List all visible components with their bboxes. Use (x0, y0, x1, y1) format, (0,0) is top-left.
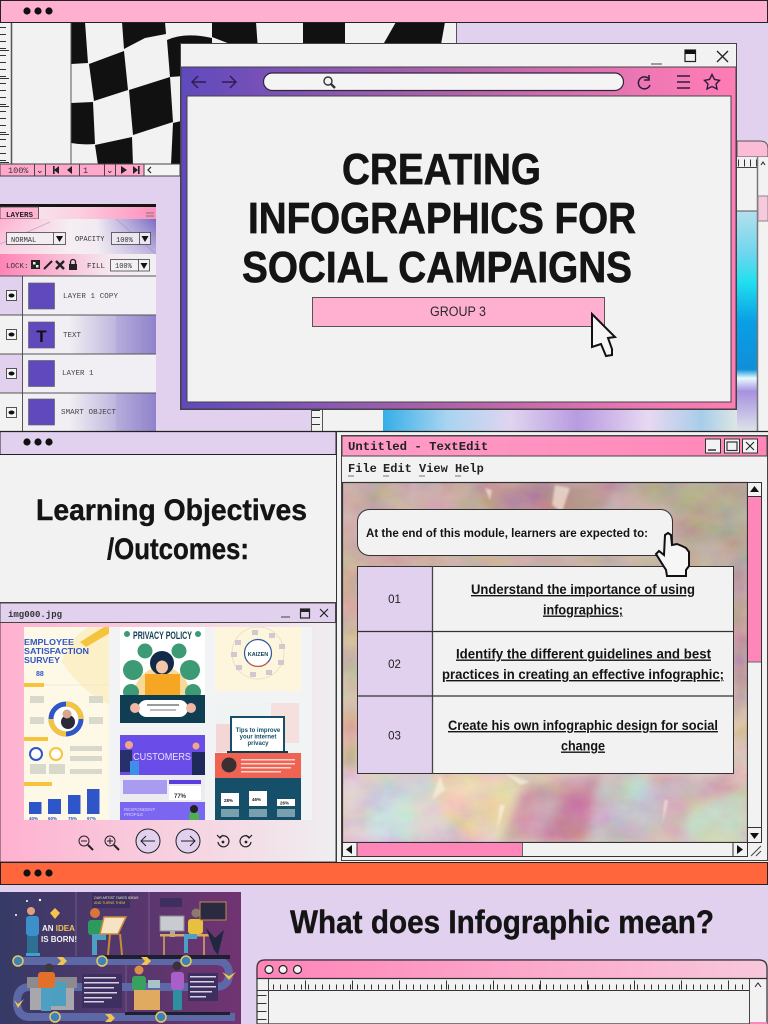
process path (17, 961, 235, 1017)
row 2: Identify the different guidelines and best (456, 646, 711, 662)
editor title bar (342, 436, 767, 456)
viewer title bar (0, 603, 336, 622)
bottom window rulers (257, 979, 767, 1024)
lock row: LOCK: (6, 263, 29, 271)
layer rows: LAYER 1 COPY (63, 293, 118, 301)
editor menu: View (419, 462, 449, 476)
row 2 (388, 646, 724, 682)
thumbnail: customers: CUSTOMERS (133, 752, 191, 763)
editor menu: Edit (383, 462, 412, 476)
editor menu: File (348, 462, 377, 476)
thumbnail: employee survey: SURVEY (24, 655, 60, 665)
address bar (264, 73, 624, 90)
subtitle button (312, 298, 604, 326)
heading: learning objectives: /Outcomes: (107, 533, 249, 566)
layer rows: SMART OBJECT (61, 409, 116, 417)
row 3: 03 (388, 730, 401, 742)
icon: hand cursor (656, 533, 689, 576)
blend controls: NORMAL (11, 237, 36, 245)
blend controls: OPACITY (75, 236, 105, 244)
infographic thumbnail: process story: OUR ARTIST TAKES IDEAS (94, 896, 139, 900)
title (242, 145, 636, 292)
nav arrows (192, 76, 236, 88)
section divider bar: orange (0, 862, 768, 884)
subtitle button: GROUP 3 (430, 304, 486, 319)
thumbnail: privacy policy (120, 627, 205, 723)
blend controls: 100% (116, 237, 134, 245)
bottom window (257, 960, 767, 1024)
blend controls (0, 219, 156, 254)
layers panel (0, 204, 156, 431)
icon: refresh (638, 75, 650, 89)
swatches (28, 283, 54, 425)
editor menu (348, 462, 484, 476)
text editor window (342, 436, 768, 860)
heading: what does infographic mean: What does Infographic mean? (290, 904, 714, 940)
infographic thumbnail: process story: IS BORN! (41, 935, 77, 944)
thumbnail: internet privacy: your internet (240, 734, 276, 740)
thumbnail: customers: 77% (174, 794, 187, 800)
row 3: Create his own infographic design for social (448, 717, 718, 733)
row 2: 02 (388, 659, 401, 671)
step nodes (13, 956, 191, 1022)
figure: designer (160, 902, 226, 955)
eye toggles (6, 290, 16, 418)
heading: learning objectives (36, 494, 307, 566)
thumbnail: customers (120, 735, 205, 820)
figure: printer (27, 964, 77, 1011)
thumbnail: employee survey: 75% (68, 816, 77, 821)
thumbnail: employee survey: 97% (87, 816, 96, 821)
heading: learning objectives: Learning Objectives (36, 494, 307, 527)
back window: checkered canvas: ⌄ (106, 165, 114, 175)
lock row: FILL (87, 263, 106, 271)
status bar (0, 164, 180, 176)
thumbnail: employee survey (24, 627, 110, 821)
row 1: Understand the importance of using (471, 581, 695, 597)
thumbnail: internet privacy: Tips to improve (236, 728, 281, 734)
lock row (0, 254, 156, 276)
title: CREATING (342, 145, 541, 194)
row 1: infographics; (543, 602, 623, 618)
editor menu: Help (455, 462, 484, 476)
infographic thumbnail: process story: AND TURNS THEM (94, 901, 125, 905)
lock row: 100% (115, 263, 133, 271)
thumbnail: privacy policy: PRIVACY POLICY (133, 630, 192, 642)
icon: search (324, 77, 335, 88)
thumbnail: kaizen: KAIZEN (248, 652, 268, 658)
thumbnail: employee survey: EMPLOYEE (24, 637, 74, 647)
callout: module intro: At the end of this module, learners are expected to: (366, 526, 648, 540)
infographic thumbnail: process story (0, 892, 241, 1024)
holographic foil image (343, 483, 747, 842)
layer rows (0, 276, 156, 431)
infographic thumbnail: process story: AN IDEA (42, 924, 75, 933)
thumbnail: employee survey: 88 (36, 671, 44, 678)
thumbnail: internet privacy: 28% (224, 798, 233, 803)
row 1: 01 (388, 594, 401, 606)
image viewer window: img000.jpg (8, 610, 62, 620)
top title bar (0, 0, 768, 22)
gradient frame (181, 67, 736, 409)
checker pattern (71, 22, 445, 165)
thumbnail: internet privacy: 26% (280, 800, 289, 806)
tabs (0, 207, 156, 219)
icon: menu (677, 76, 690, 88)
image viewer window (0, 602, 336, 862)
row 2: practices in creating an effective infographic; (442, 666, 724, 682)
figure: idea (26, 907, 40, 956)
main browser window (180, 44, 736, 410)
thumbnail: employee survey: 60% (48, 816, 57, 821)
callout: module intro (358, 510, 672, 556)
editor title bar: Untitled - TextEdit (348, 440, 488, 454)
back window: checkered canvas (0, 22, 457, 176)
figure: sketching (88, 908, 126, 955)
vertical scrollbar (748, 482, 762, 842)
objectives table (357, 566, 734, 774)
layer rows: TEXT (63, 332, 82, 340)
row 1 (388, 581, 695, 618)
layers panel: LAYERS (6, 212, 34, 220)
row 3: change (561, 738, 605, 754)
layer rows: LAYER 1 (62, 370, 94, 378)
section divider bar: learning objectives (0, 431, 768, 862)
row 3 (388, 717, 718, 754)
thumbnail: customers: RESPONDENT (124, 807, 156, 812)
thumbnail: employee survey: SATISFACTION (24, 646, 89, 656)
viewer controls (79, 829, 252, 853)
back window: checkered canvas: 1 (83, 166, 88, 176)
icon: star (704, 74, 720, 89)
back window: checkered canvas: 100% (8, 166, 29, 176)
thumbnail: customers: PROFILE (124, 812, 143, 817)
thumbnail: employee survey: 40% (29, 816, 38, 821)
horizontal scrollbar (342, 842, 761, 856)
thumbnail: internet privacy: privacy (247, 741, 269, 747)
figure: tailors (132, 962, 184, 1010)
back window right: holographic strip (737, 141, 768, 431)
back window: checkered canvas: ⌄ (36, 165, 44, 175)
window controls (651, 50, 728, 64)
icon: arrow cursor (592, 314, 615, 356)
title: INFOGRAPHICS FOR (248, 194, 636, 243)
title: SOCIAL CAMPAIGNS (242, 243, 632, 292)
left ruler (10, 23, 12, 164)
back window bottom: holographic strip and ruler (311, 408, 737, 431)
thumbnail: kaizen (215, 627, 301, 691)
thumbnail: internet privacy: 46% (252, 797, 261, 802)
layer rows: T (36, 327, 47, 346)
bottom window title bar (257, 960, 767, 978)
thumbnail: internet privacy (215, 703, 301, 820)
